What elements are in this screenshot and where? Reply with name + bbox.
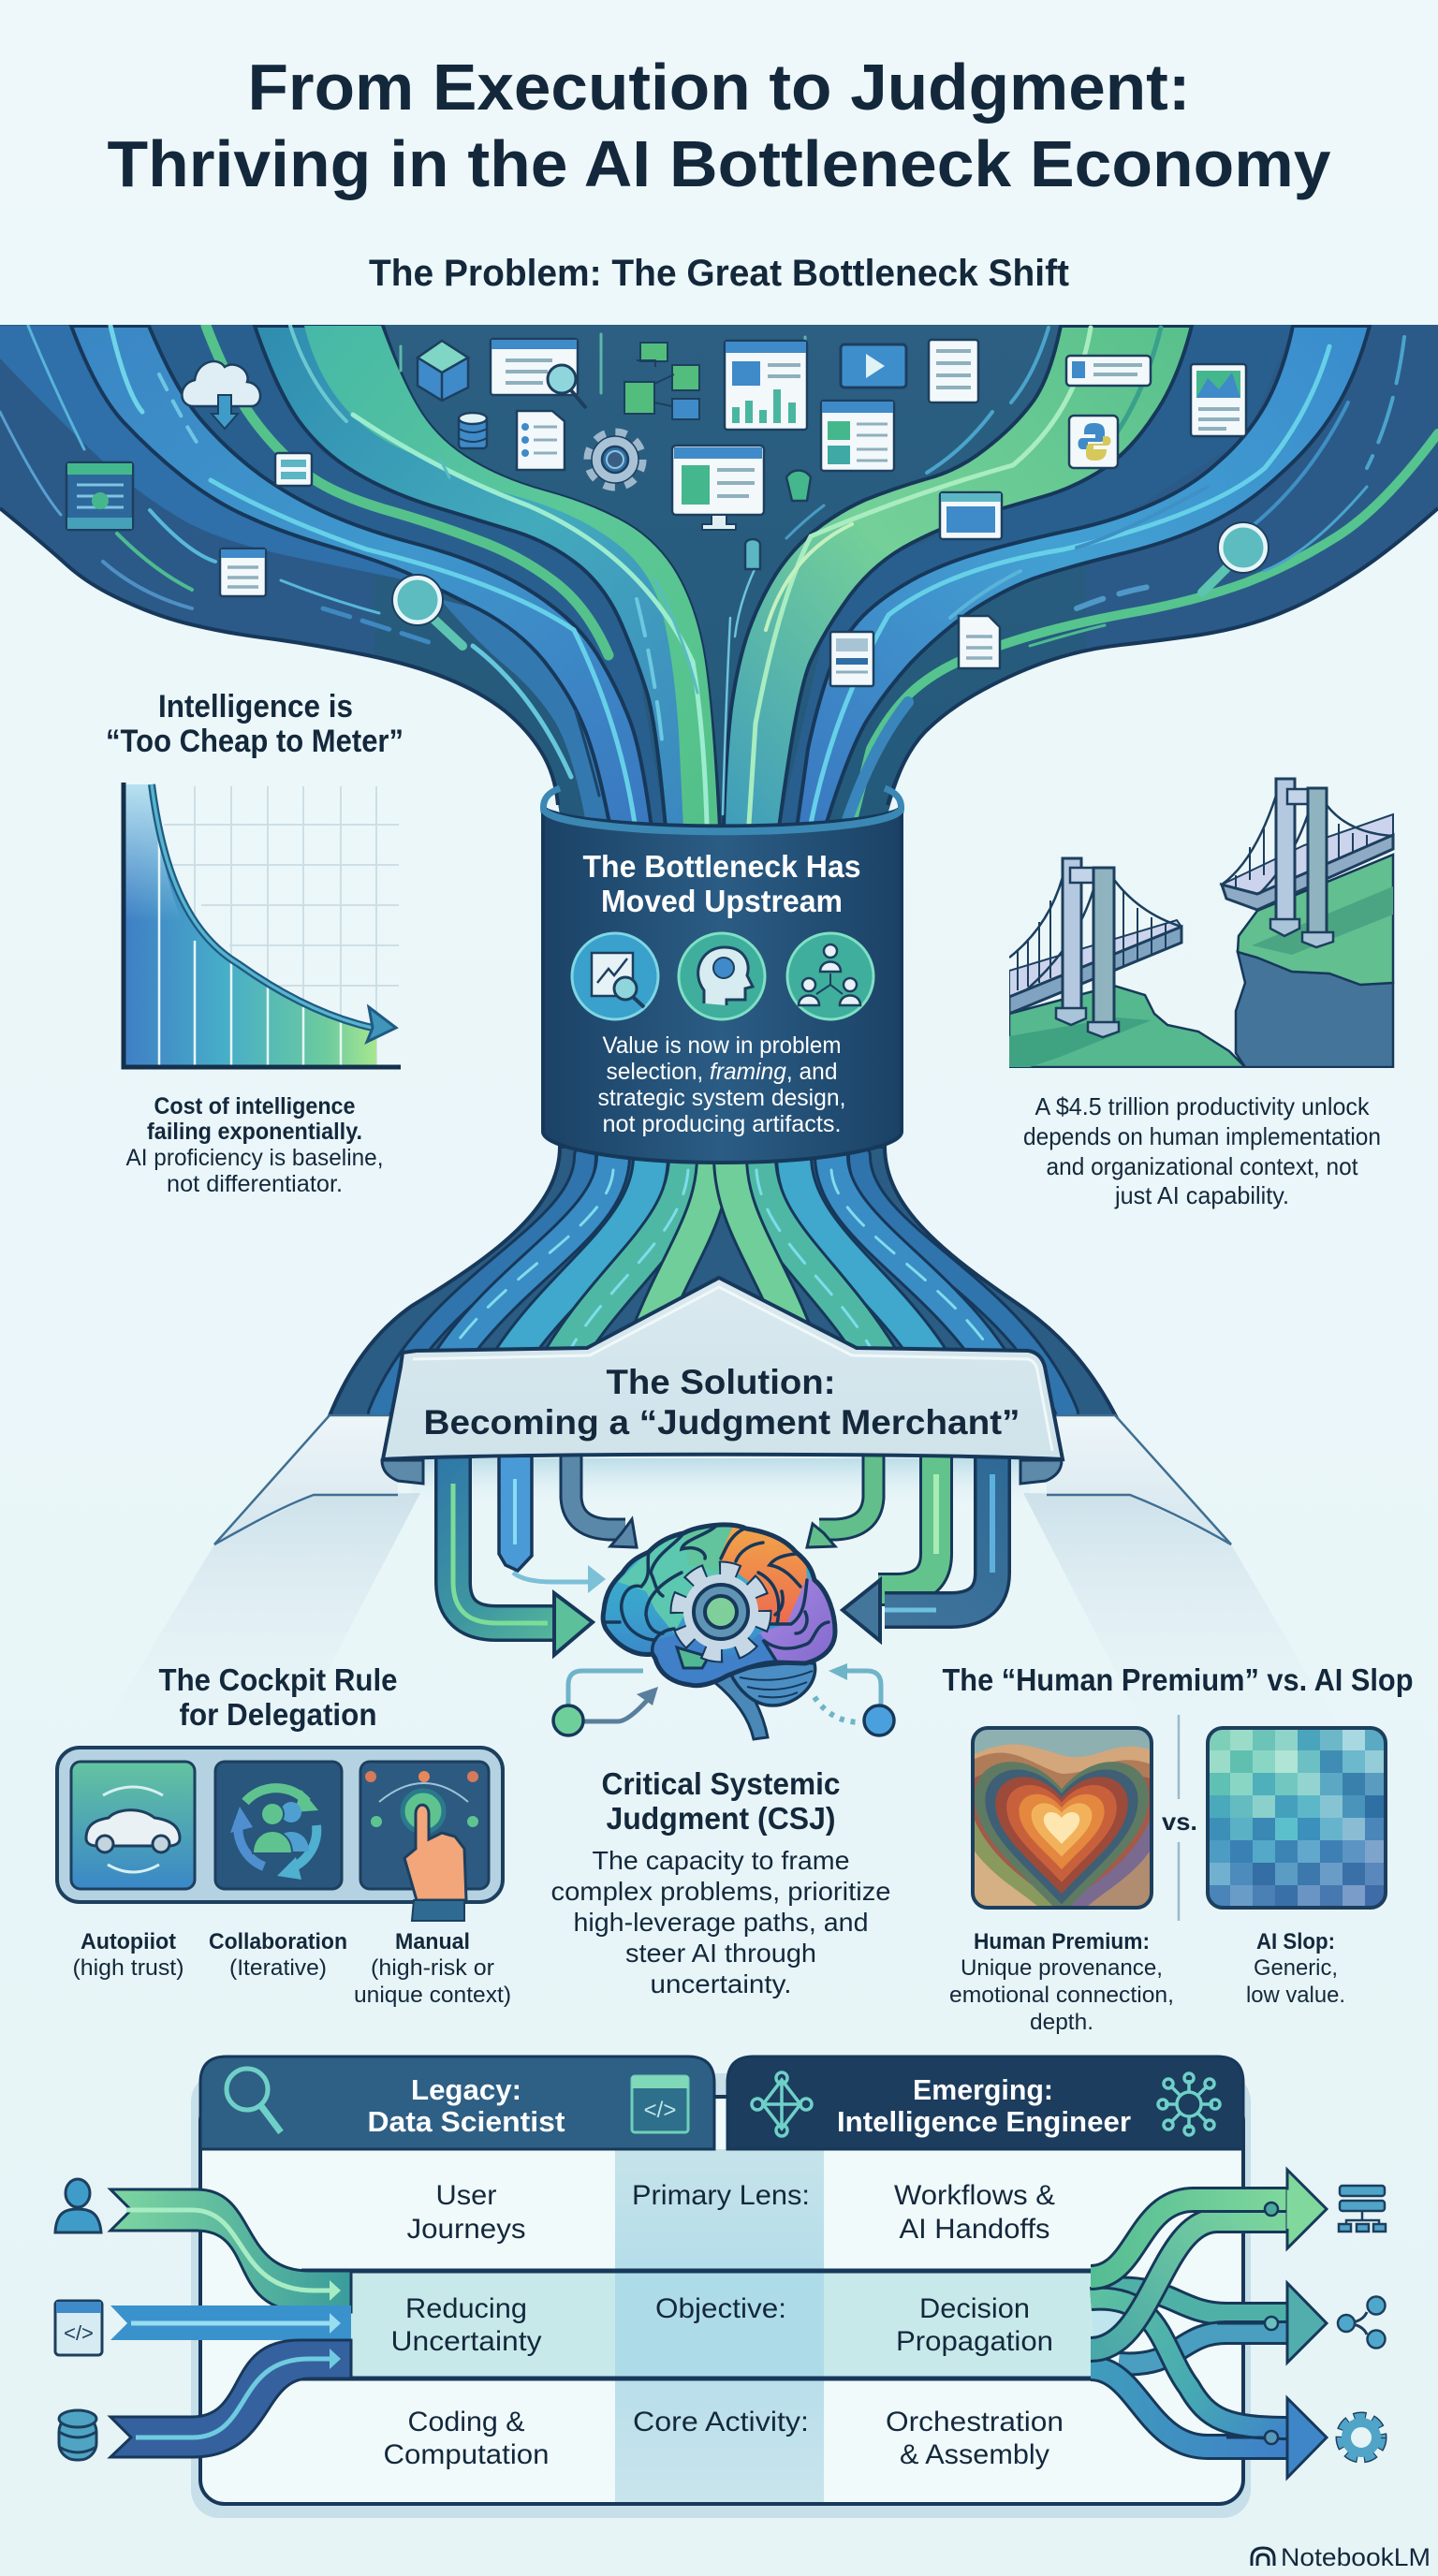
icon: small card left (275, 453, 312, 486)
heading: Critical Systemic (601, 1766, 841, 1801)
icon: monitor (672, 446, 764, 530)
arrow: blue output (1091, 2299, 1327, 2478)
heading: the problem: The Problem: The Great Bottleneck Shift (369, 253, 1069, 294)
icon: data grid (66, 462, 133, 530)
panel: comparison table (191, 2056, 1251, 2518)
arrow: dark input (110, 2340, 351, 2457)
caption: AI proficiency is baseline, (125, 1145, 384, 1171)
labels: unique context) (354, 1983, 511, 2008)
icon: small window left (220, 549, 266, 596)
icon: notebook logo (1252, 2548, 1274, 2566)
label: ai slop: AI Slop: (1256, 1929, 1335, 1954)
heading: Judgment (CSJ) (607, 1801, 835, 1836)
caption: not differentiator. (167, 1171, 343, 1197)
row text: objective: Objective: (655, 2293, 786, 2324)
icon: team network (787, 933, 873, 1019)
arrow: teal output (1109, 2283, 1327, 2364)
panel: cockpit rule (57, 1662, 511, 2008)
panel: critical systemic judgment (550, 1766, 891, 1998)
card: collaboration (215, 1762, 342, 1889)
header text: Data Scientist (367, 2105, 565, 2138)
cup body text: selection, framing, and (607, 1059, 837, 1085)
banner heading: Becoming a “Judgment Merchant” (423, 1403, 1020, 1442)
row text: core activity: Computation (384, 2439, 549, 2470)
caption: failing exponentially. (147, 1119, 362, 1145)
row text: objective: Decision (919, 2293, 1030, 2324)
arrows from banner to brain (453, 1456, 992, 1655)
icon: brain with gear (599, 1518, 843, 1739)
heading: Intelligence is (158, 689, 353, 724)
text: productivity unlock: depends on human implementation (1023, 1122, 1381, 1150)
icon: person (55, 2179, 101, 2232)
label: human premium: Unique provenance, (961, 1955, 1163, 1981)
icon: code window (55, 2301, 102, 2355)
arrow: green output (1091, 2170, 1327, 2349)
icon: list document (517, 411, 565, 470)
table body (200, 2097, 1243, 2504)
panel: human premium vs ai slop (942, 1662, 1414, 2035)
left bridge span (1009, 858, 1181, 1037)
row text: objective: Reducing (405, 2293, 527, 2324)
caption: Cost of intelligence (154, 1093, 356, 1120)
row text: core activity: Orchestration (886, 2407, 1064, 2437)
label: human premium (949, 1929, 1174, 2035)
middle row (301, 2271, 1105, 2378)
heading (159, 1662, 397, 1732)
heading: The “Human Premium” vs. AI Slop (942, 1662, 1414, 1697)
arrow: blue input (110, 2305, 351, 2340)
caption (125, 1093, 384, 1197)
icon: document right (959, 616, 1000, 668)
panel: bridge illustration (1009, 779, 1393, 1067)
chart: falling cost curve (124, 783, 401, 1067)
icon: video (841, 344, 906, 388)
header: legacy (200, 2056, 714, 2149)
cup heading: Moved Upstream (601, 884, 843, 918)
arrow: right green (878, 1456, 936, 1589)
title: From Execution to Judgment: (247, 51, 1191, 124)
cup body text: Value is now in problem (603, 1032, 841, 1059)
notebooklm watermark (1252, 2543, 1431, 2571)
arrow: left large (453, 1456, 593, 1655)
row text: objective: Uncertainty (391, 2326, 541, 2357)
body text: uncertainty. (650, 1969, 792, 1998)
body text (550, 1846, 891, 1998)
icon: window (821, 401, 894, 471)
icon: python logo card (1069, 416, 1118, 468)
icon: gear (588, 432, 642, 487)
cup body text: not producing artifacts. (603, 1111, 841, 1137)
row text: primary lens (406, 2180, 1055, 2245)
row text: core activity: Coding & (408, 2407, 524, 2437)
icon: document with chart (725, 341, 807, 430)
labels: (high trust) (73, 1955, 183, 1981)
header text (837, 2073, 1131, 2138)
label: human premium: Human Premium: (974, 1929, 1150, 1954)
body text: complex problems, prioritize (550, 1877, 891, 1906)
icon: card (1066, 356, 1151, 386)
icon: cube (418, 341, 468, 401)
labels: (high-risk or (371, 1955, 494, 1981)
icon: diamond network (752, 2072, 812, 2136)
icon: database (59, 2410, 96, 2460)
banner heading (423, 1363, 1020, 1442)
cup heading: The Bottleneck Has (582, 849, 861, 884)
text: productivity unlock: A $4.5 trillion productivity unlock (1035, 1092, 1370, 1120)
icon: head with idea (679, 933, 765, 1019)
heading (106, 689, 404, 759)
icon: cloud (182, 361, 260, 429)
heading (601, 1766, 841, 1836)
arrow: upper left (571, 1456, 637, 1547)
icon: magnifier right (1202, 522, 1269, 593)
right bridge span (1222, 779, 1393, 947)
row text: core activity (384, 2407, 1064, 2470)
solution banner (383, 1278, 1063, 1459)
arrow: left thin (499, 1456, 606, 1593)
heading: The Cockpit Rule (159, 1662, 397, 1697)
row text: core activity: Core Activity: (633, 2407, 809, 2437)
card: manual with hand (360, 1762, 489, 1921)
input arrows (110, 2189, 351, 2457)
text: productivity unlock: and organizational context, not (1047, 1152, 1358, 1180)
row text: primary lens: Journeys (406, 2214, 526, 2245)
row text: primary lens: User (436, 2180, 497, 2211)
funnel: data streams converging (0, 325, 1438, 830)
title (107, 51, 1331, 200)
arrow: upper right (807, 1456, 873, 1547)
heading: for Delegation (180, 1697, 376, 1732)
header text: Emerging: (913, 2073, 1053, 2106)
output arrows (1091, 2170, 1327, 2478)
row text: objective: Propagation (896, 2326, 1053, 2357)
illustration: pixelated mosaic (1208, 1728, 1386, 1908)
body text: steer AI through (625, 1939, 816, 1968)
illustration: layered heart (973, 1728, 1152, 1915)
card: autopilot (71, 1762, 195, 1889)
label: human premium: emotional connection, (949, 1983, 1174, 2008)
labels: (Iterative) (229, 1955, 327, 1981)
icon: window right (940, 492, 1002, 539)
banner heading: The Solution: (607, 1363, 835, 1401)
icon: magnifier (227, 2069, 281, 2132)
header text (367, 2073, 565, 2138)
heading: “Too Cheap to Meter” (106, 724, 404, 759)
label: ai slop: low value. (1246, 1983, 1345, 2008)
label: human premium: depth. (1030, 2010, 1093, 2035)
wordmark: NotebookLM (1281, 2543, 1431, 2571)
cup body text (597, 1032, 846, 1137)
divider and vs: vs. (1162, 1808, 1197, 1836)
icon: gear in brain (679, 1570, 763, 1654)
row text: objective (391, 2293, 1053, 2357)
header text: Intelligence Engineer (837, 2105, 1131, 2138)
body text: The capacity to frame (592, 1846, 850, 1875)
icon: small tools (745, 470, 811, 569)
cup heading (582, 849, 861, 918)
row text: primary lens: AI Handoffs (899, 2214, 1050, 2245)
row text: primary lens: Primary Lens: (632, 2180, 810, 2211)
icon: flow diagram (624, 343, 699, 419)
icon: document with area chart (1191, 364, 1246, 436)
label: ai slop: Generic, (1254, 1955, 1338, 1981)
output junction highlight (1093, 2305, 1137, 2342)
text: productivity unlock: just AI capability. (1114, 1181, 1289, 1209)
labels (73, 1929, 511, 2008)
icon: code window: </> (64, 2321, 94, 2345)
cup body text: strategic system design, (597, 1085, 846, 1111)
bottleneck cup (543, 788, 902, 1163)
arrow: green input (110, 2189, 351, 2312)
labels: Autopiiot (81, 1929, 176, 1954)
icons floating in the funnel (66, 339, 1269, 686)
icon: database (459, 413, 487, 448)
header: emerging (727, 2056, 1243, 2149)
icon: hub network (1158, 2073, 1220, 2135)
labels: Manual (395, 1929, 470, 1954)
panel: too cheap to meter (106, 689, 404, 1197)
header text: Legacy: (411, 2073, 521, 2106)
icon: text document (929, 340, 978, 402)
icon: chart analysis (572, 933, 658, 1019)
icon: window with magnifier (491, 339, 586, 408)
lower streams below the bottleneck (329, 1147, 1117, 1418)
feedback nodes (553, 1663, 894, 1735)
icon: org chart (1339, 2186, 1386, 2232)
icon: code window (632, 2076, 688, 2132)
icon: code window: </> (644, 2098, 676, 2123)
cockpit frame (57, 1748, 503, 1902)
labels: Collaboration (209, 1929, 347, 1954)
banner wings and shadow (84, 1415, 1357, 1760)
arrow: right large (843, 1456, 992, 1641)
icon: gear (1342, 2418, 1381, 2457)
label: ai slop (1246, 1929, 1345, 2008)
row text: primary lens: Workflows & (894, 2180, 1055, 2211)
icon: share nodes (1338, 2297, 1386, 2348)
icon: newspaper (830, 632, 873, 686)
row text: core activity: & Assembly (900, 2439, 1049, 2470)
icon: magnifier left (392, 575, 462, 646)
centre column shading (615, 2149, 824, 2502)
body text: high-leverage paths, and (573, 1908, 869, 1937)
title: Thriving in the AI Bottleneck Economy (107, 127, 1331, 200)
text: productivity unlock (1023, 1092, 1381, 1209)
